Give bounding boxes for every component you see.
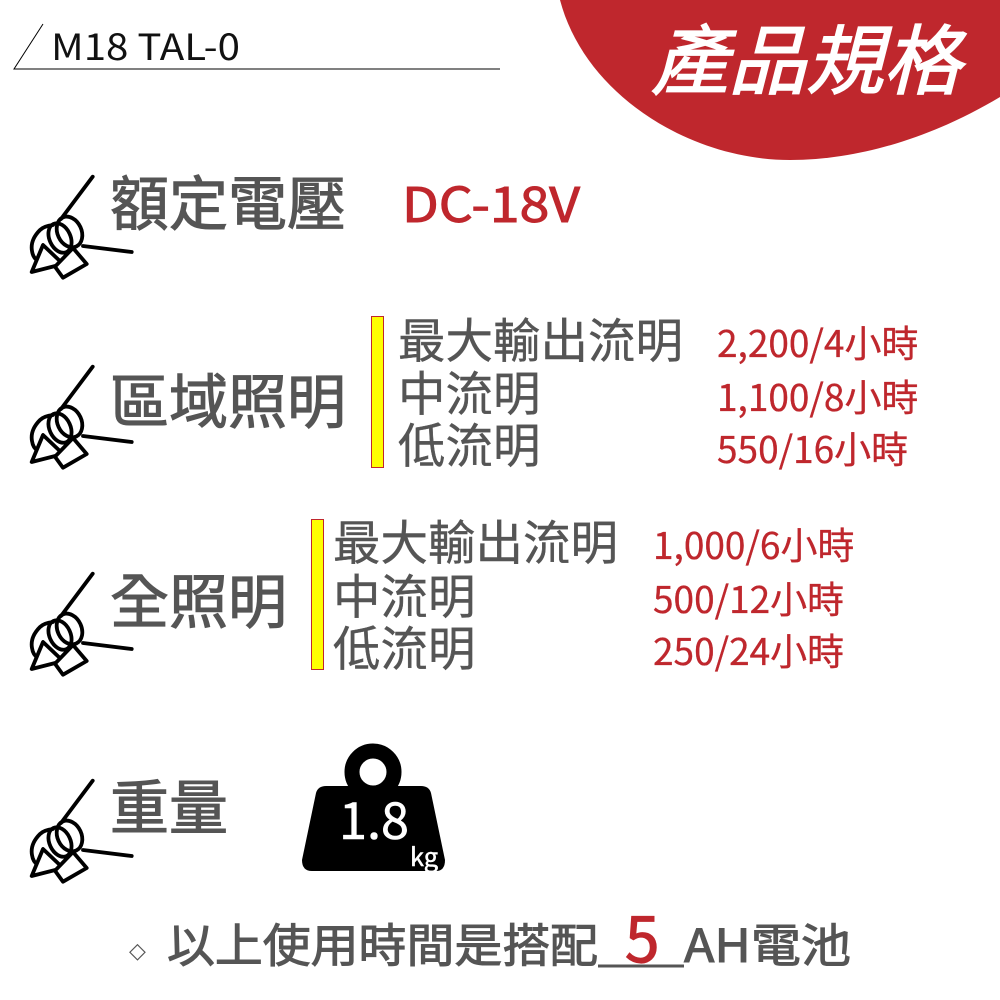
footnote bbox=[129, 890, 851, 980]
runtime values bbox=[717, 314, 918, 474]
runtime values: 250/24小時 bbox=[653, 622, 844, 676]
heading: weight: 重量 bbox=[110, 761, 228, 846]
modes list: 最大輸出流明 bbox=[333, 505, 618, 574]
yellow bar bbox=[372, 316, 384, 468]
row: weight bbox=[32, 751, 445, 882]
model header: M18 TAL-0 bbox=[51, 19, 240, 71]
heading: full lighting: 全照明 bbox=[110, 555, 287, 640]
heading: rated voltage: 額定電壓 bbox=[110, 157, 346, 242]
icon: work light bbox=[32, 177, 132, 278]
modes list: 中流明 bbox=[398, 356, 540, 425]
modes list bbox=[333, 505, 618, 680]
icon: kettlebell weight 1.8kg bbox=[302, 751, 445, 874]
runtime values: 1,100/8小時 bbox=[717, 368, 918, 422]
icon: work light bbox=[32, 367, 132, 468]
modes list: 低流明 bbox=[398, 408, 540, 477]
row: full lighting bbox=[32, 505, 854, 680]
icon: kettlebell weight 1.8kg: kg bbox=[410, 838, 438, 874]
icon: work light bbox=[32, 574, 132, 675]
row: area lighting bbox=[32, 303, 918, 477]
modes list: 中流明 bbox=[333, 559, 476, 628]
runtime values: 500/12小時 bbox=[653, 570, 844, 624]
modes list: 低流明 bbox=[333, 611, 476, 680]
footnote: 5 bbox=[625, 890, 659, 980]
yellow bar bbox=[312, 520, 324, 670]
runtime values: 2,200/4小時 bbox=[717, 314, 918, 368]
title: 產品規格 bbox=[651, 0, 967, 110]
model header bbox=[14, 19, 500, 71]
icon: work light bbox=[32, 781, 132, 882]
modes list bbox=[398, 303, 683, 477]
icon: kettlebell weight 1.8kg: 1.8 bbox=[339, 782, 409, 854]
runtime values bbox=[653, 516, 854, 676]
row: rated voltage bbox=[32, 157, 580, 278]
heading: area lighting: 區域照明 bbox=[110, 355, 346, 440]
footnote: ◇ bbox=[129, 939, 146, 964]
footnote: AH電池 bbox=[684, 910, 851, 976]
banner: red title shape bbox=[560, 0, 1000, 160]
runtime values: 550/16小時 bbox=[717, 420, 908, 474]
modes list: 最大輸出流明 bbox=[398, 303, 683, 372]
value: DC-18V: DC-18V bbox=[402, 166, 580, 236]
footnote: 以上使用時間是搭配 bbox=[167, 910, 598, 976]
runtime values: 1,000/6小時 bbox=[653, 516, 854, 570]
